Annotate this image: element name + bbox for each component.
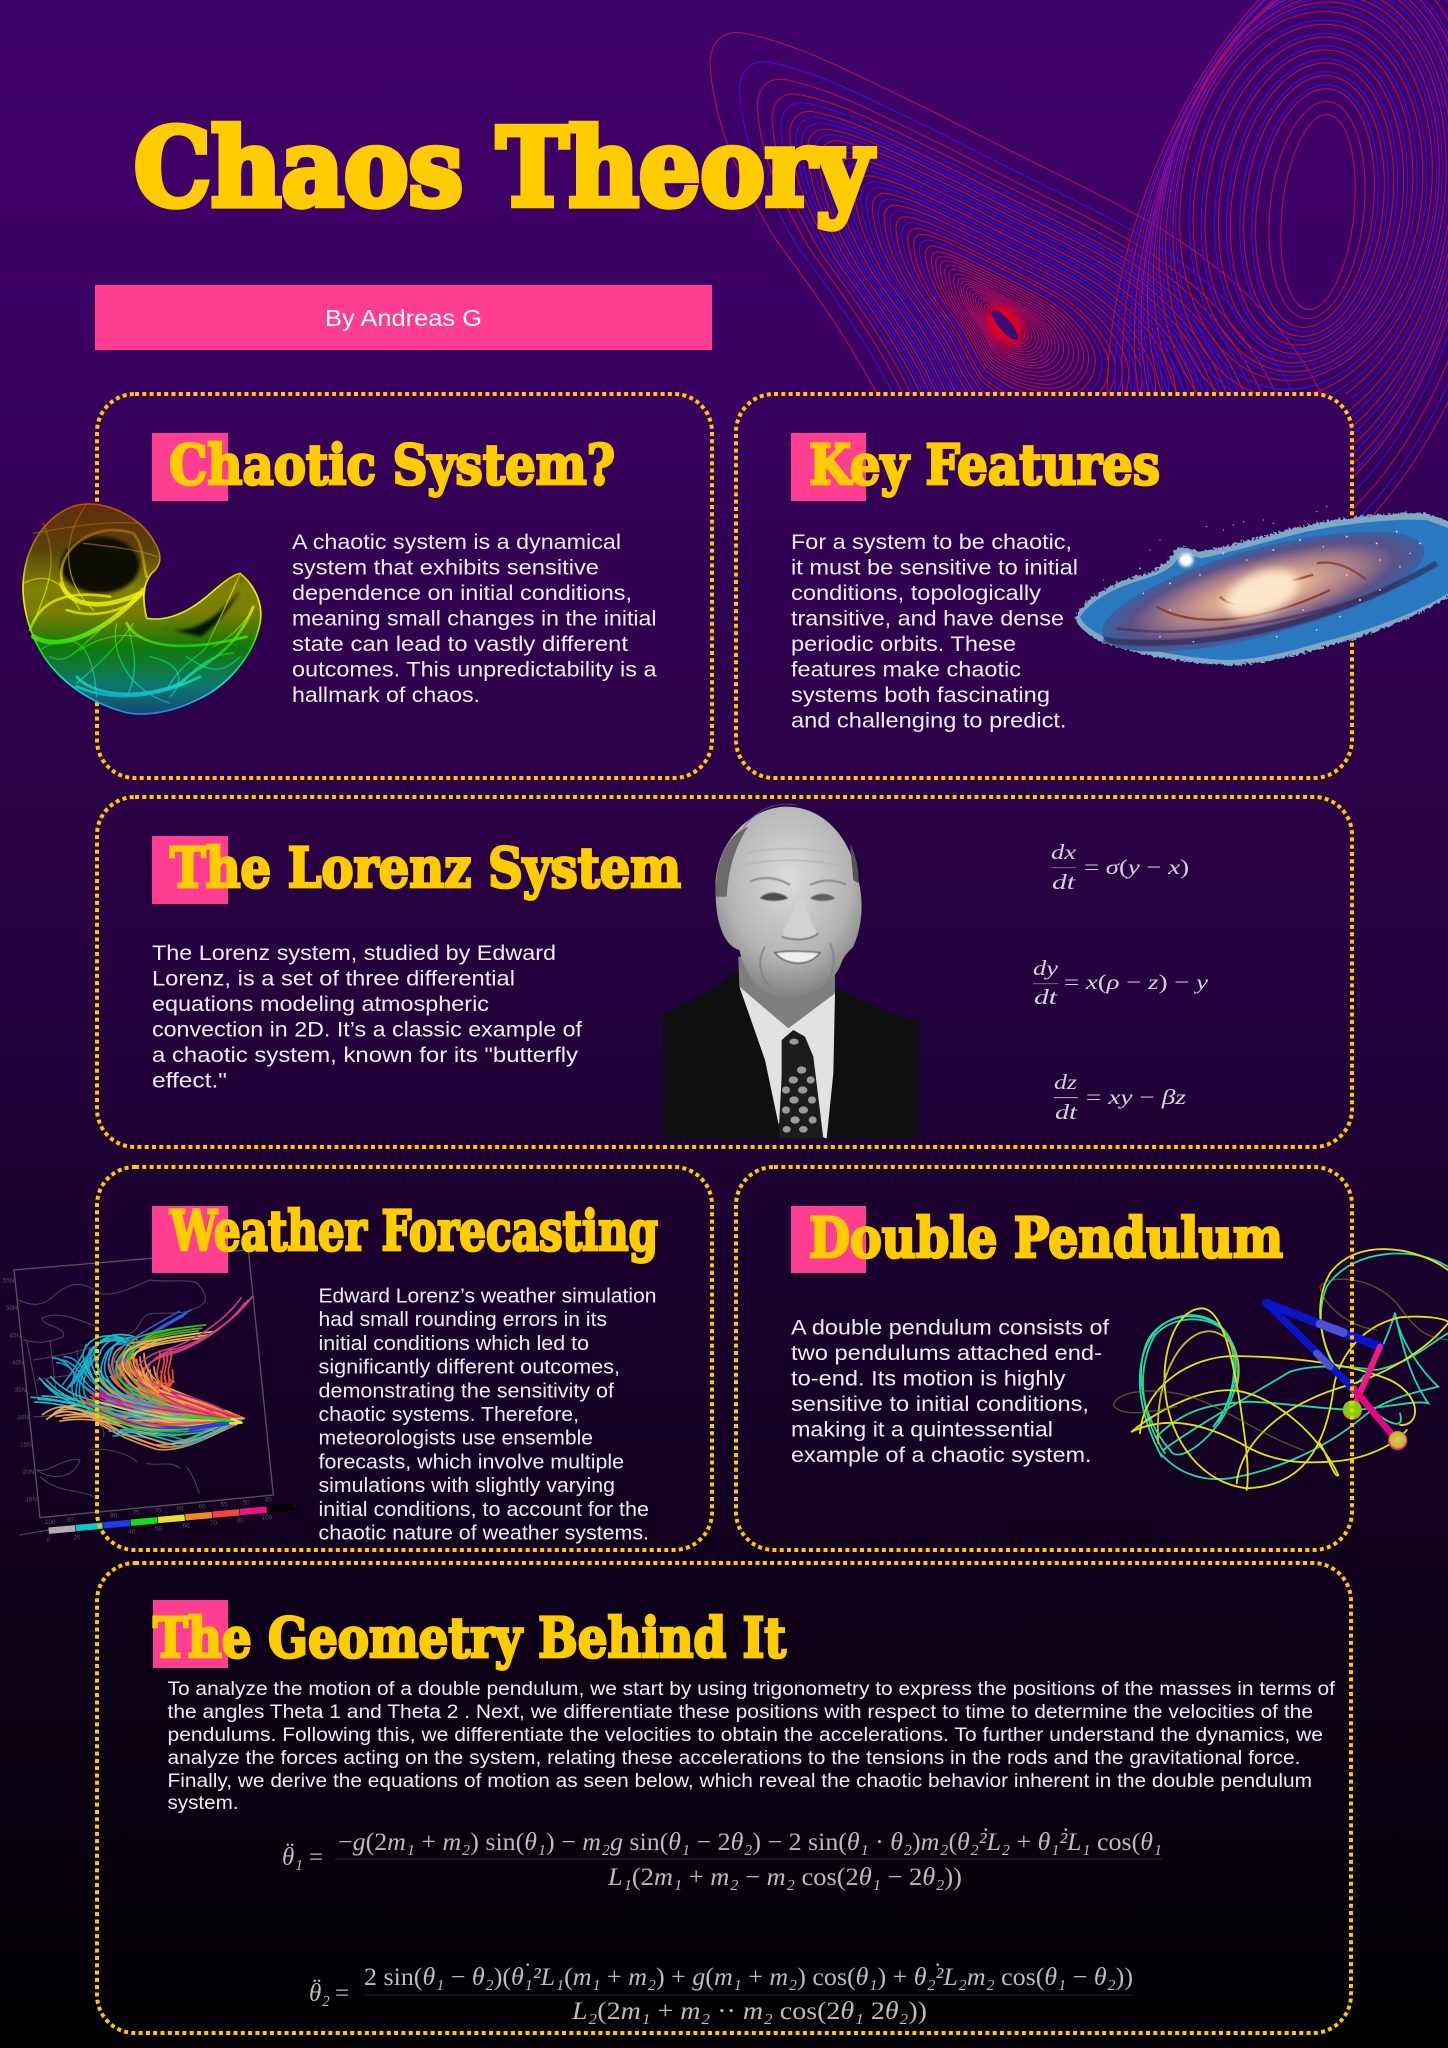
text: key features description: [791, 530, 1078, 732]
equation: dy/dt: = x(ρ − z) − y: [1064, 970, 1209, 994]
text: weather description: [318, 1286, 656, 1544]
text: chaotic system description: A chaotic system is a dynamical: [292, 530, 621, 554]
text: double pendulum description: [791, 1316, 1109, 1467]
text: weather description: chaotic nature of weather systems.: [318, 1522, 649, 1544]
text: key features description: For a system to be chaotic,: [791, 530, 1072, 554]
text: chaotic system description: meaning small changes in the initial: [292, 606, 656, 630]
heading: chaotic system: Chaotic System?: [169, 432, 615, 497]
text: double pendulum description: making it a quintessential: [791, 1418, 1053, 1442]
map and scale tick labels: 0: [47, 1537, 51, 1544]
text: chaotic system description: outcomes. This unpredictability is a: [292, 658, 657, 682]
map and scale tick labels: 50N: [6, 1305, 18, 1312]
text: Lorenz description: convection in 2D. It’s a classic example of: [152, 1018, 582, 1042]
text: double pendulum description: A double pendulum consists of: [791, 1316, 1109, 1340]
text: Lorenz description: Lorenz, is a set of three differential: [152, 966, 515, 990]
equation: theta 1 double dot: ˙: [1060, 1824, 1068, 1851]
Lorenz attractor spiral decoration: [710, 0, 1448, 516]
text: key features description: it must be sensitive to initial: [791, 556, 1078, 580]
text: chaotic system description: [292, 530, 657, 707]
map and scale tick labels: 35N: [15, 1387, 27, 1394]
text: Lorenz description: The Lorenz system, studied by Edward: [152, 941, 556, 965]
text: geometry description: system.: [168, 1793, 238, 1814]
equation: theta 1 double dot: [282, 1824, 1162, 1891]
title: Chaos Theory: [134, 106, 875, 231]
text: weather description: demonstrating the sensitivity of: [318, 1380, 614, 1402]
heading: weather forecasting: Weather Forecasting: [169, 1198, 658, 1263]
map and scale tick labels: 75: [133, 1510, 140, 1517]
heading: the geometry behind it: The Geometry Behind It: [153, 1605, 787, 1670]
icon: rainbow strange attractor: [23, 504, 261, 714]
map and scale tick labels: 80: [237, 1517, 244, 1524]
equation: dz/dt: [1054, 1070, 1186, 1124]
equation: theta 2 double dot: θ₂: [309, 1980, 330, 2007]
text: geometry description: Finally, we derive the equations of motion as seen below, which reveal the chaotic behavior inherent in the double pendulum: [168, 1771, 1312, 1792]
equation: dx/dt: dt: [1052, 870, 1077, 894]
map and scale tick labels: 40N: [12, 1360, 24, 1367]
chart: ensemble hurricane track map: [3, 1250, 293, 1544]
text: double pendulum description: sensitive to initial conditions,: [791, 1392, 1089, 1416]
byline bar: [95, 285, 712, 350]
text: chaotic system description: hallmark of chaos.: [292, 683, 480, 707]
equation: dz/dt: = xy − βz: [1086, 1085, 1186, 1109]
equation: theta 1 double dot: θ₁: [282, 1844, 303, 1871]
text: key features description: systems both fascinating: [791, 683, 1050, 707]
panel: the Lorenz system: [97, 797, 1352, 1147]
text: weather description: simulations with slightly varying: [318, 1475, 615, 1497]
heading: the Lorenz system: The Lorenz System: [170, 835, 681, 900]
text: double pendulum description: example of a chaotic system.: [791, 1443, 1092, 1467]
text: weather description: chaotic systems. Therefore,: [318, 1404, 579, 1426]
panel: the geometry behind it: [97, 1563, 1351, 2033]
text: key features description: transitive, and have dense: [791, 606, 1064, 630]
map and scale tick labels: 20: [73, 1534, 81, 1541]
text: double pendulum description: two pendulums attached end-: [791, 1341, 1102, 1365]
text: Lorenz description: effect.": [152, 1068, 227, 1092]
map and scale tick labels: [3, 1278, 273, 1544]
equation: theta 1 double dot: ˙: [980, 1824, 988, 1851]
map and scale tick labels: 70: [155, 1508, 162, 1515]
text: geometry description: [168, 1679, 1336, 1814]
equation: theta 1 double dot: L₁(2m₁ + m₂ − m₂ cos(2θ₁ − 2θ₂)): [607, 1864, 962, 1891]
text: weather description: forecasts, which involve multiple: [318, 1451, 624, 1473]
map and scale tick labels: 45N: [9, 1332, 21, 1339]
byline bar: By Andreas G: [325, 305, 482, 331]
map and scale tick labels: 45: [265, 1496, 272, 1503]
map and scale tick labels: 50: [243, 1500, 250, 1507]
equation: theta 2 double dot: =: [335, 1980, 349, 2007]
map and scale tick labels: 70: [210, 1520, 218, 1527]
equation: dy/dt: dy: [1033, 956, 1059, 980]
heading: double pendulum: Double Pendulum: [809, 1205, 1283, 1270]
equation: theta 2 double dot: ˙: [932, 1959, 940, 1986]
text: chaotic system description: state can lead to vastly different: [292, 632, 628, 656]
icon: spiral galaxy: [1075, 506, 1448, 677]
text: weather description: meteorologists use ensemble: [318, 1428, 593, 1450]
map and scale tick labels: 55: [221, 1502, 228, 1509]
map and scale tick labels: 100: [262, 1514, 273, 1521]
text: weather description: significantly different outcomes,: [318, 1357, 620, 1379]
equation: theta 2 double dot: [309, 1959, 1133, 2025]
equation: theta 2 double dot: ˙: [522, 1959, 530, 1986]
equation: dz/dt: dz: [1054, 1070, 1077, 1094]
equation: dy/dt: dt: [1034, 985, 1059, 1009]
text: weather description: Edward Lorenz’s weather simulation: [318, 1286, 656, 1308]
equation: theta 2 double dot: 2 sin(θ₁ − θ₂)(θ₁²L₁(m₁ + m₂) + g(m₁ + m₂) cos(θ₁) + θ₂²L₂m₂ cos(θ₁ − θ₂)): [364, 1964, 1133, 1991]
text: Lorenz description: a chaotic system, known for its "butterfly: [152, 1043, 578, 1067]
map and scale tick labels: 20N: [23, 1469, 35, 1476]
text: key features description: and challenging to predict.: [791, 708, 1066, 732]
text: geometry description: the angles Theta 1 and Theta 2 . Next, we differentiate these positions with respect to time to determine the velocities of the: [168, 1702, 1313, 1723]
text: weather description: initial conditions, to account for the: [318, 1499, 649, 1521]
panel: weather forecasting: [3, 1167, 712, 1550]
equation: dx/dt: dx: [1051, 840, 1077, 864]
map and scale tick labels: 100: [45, 1519, 56, 1526]
map and scale tick labels: 60: [199, 1504, 206, 1511]
equation: dx/dt: = σ(y − x): [1084, 855, 1189, 879]
map and scale tick labels: 80: [110, 1512, 118, 1519]
text: Lorenz description: equations modeling atmospheric: [152, 992, 489, 1016]
portrait: Edward Lorenz: [663, 804, 918, 1138]
text: geometry description: analyze the forces acting on the system, relating these accelerations to the tensions in the rods and the gravitational force.: [168, 1748, 1300, 1769]
map and scale tick labels: 65: [177, 1506, 184, 1513]
map and scale tick labels: 30N: [17, 1414, 29, 1421]
map and scale tick labels: 15N: [25, 1496, 37, 1503]
equation: dx/dt: [1051, 840, 1189, 894]
text: key features description: features make chaotic: [791, 658, 1021, 682]
panel: key features: [736, 394, 1448, 778]
text: double pendulum description: to-end. Its motion is highly: [791, 1366, 1066, 1390]
text: weather description: initial conditions which led to: [318, 1333, 589, 1355]
map and scale tick labels: 25N: [20, 1442, 32, 1449]
equation: theta 2 double dot: ¨: [311, 1975, 321, 2002]
map and scale tick labels: 55N: [3, 1278, 15, 1285]
equation: theta 1 double dot: ¨: [284, 1839, 294, 1866]
text: chaotic system description: dependence on initial conditions,: [292, 581, 632, 605]
panel: double pendulum: [736, 1167, 1448, 1550]
map and scale tick labels: 90: [67, 1517, 74, 1524]
text: key features description: periodic orbits. These: [791, 632, 1016, 656]
text: chaotic system description: system that exhibits sensitive: [292, 556, 599, 580]
map and scale tick labels: 50: [155, 1526, 163, 1533]
equation: theta 1 double dot: −g(2m₁ + m₂) sin(θ₁) − m₂g sin(θ₁ − 2θ₂) − 2 sin(θ₁ · θ₂)m₂(θ₂²L₂ + θ₁²L₁ cos(θ₁: [338, 1829, 1162, 1856]
map and scale tick labels: 60: [183, 1523, 190, 1530]
panel: chaotic system: [23, 394, 712, 778]
text: Lorenz description: [152, 941, 582, 1092]
text: weather description: had small rounding errors in its: [318, 1309, 607, 1331]
heading: key features: Key Features: [809, 432, 1160, 497]
map and scale tick labels: 40: [128, 1528, 136, 1535]
colour scale bar: [49, 1507, 293, 1531]
icon: double pendulum traces: [1113, 1249, 1448, 1490]
text: key features description: conditions, topologically: [791, 581, 1041, 605]
equation: theta 2 double dot: L₂(2m₁ + m₂ ·· m₂ cos(2 θ₁ 2θ₂)): [571, 1998, 927, 2025]
equation: dz/dt: dt: [1055, 1100, 1079, 1124]
equation: dy/dt: [1033, 956, 1209, 1009]
text: geometry description: To analyze the motion of a double pendulum, we start by using trigonometry to express the positions of the masses in terms of: [168, 1679, 1336, 1700]
text: geometry description: pendulums. Following this, we differentiate the velocities to obtain the accelerations. To further understand the dynamics, we: [168, 1725, 1323, 1746]
equation: theta 1 double dot: =: [309, 1844, 323, 1871]
